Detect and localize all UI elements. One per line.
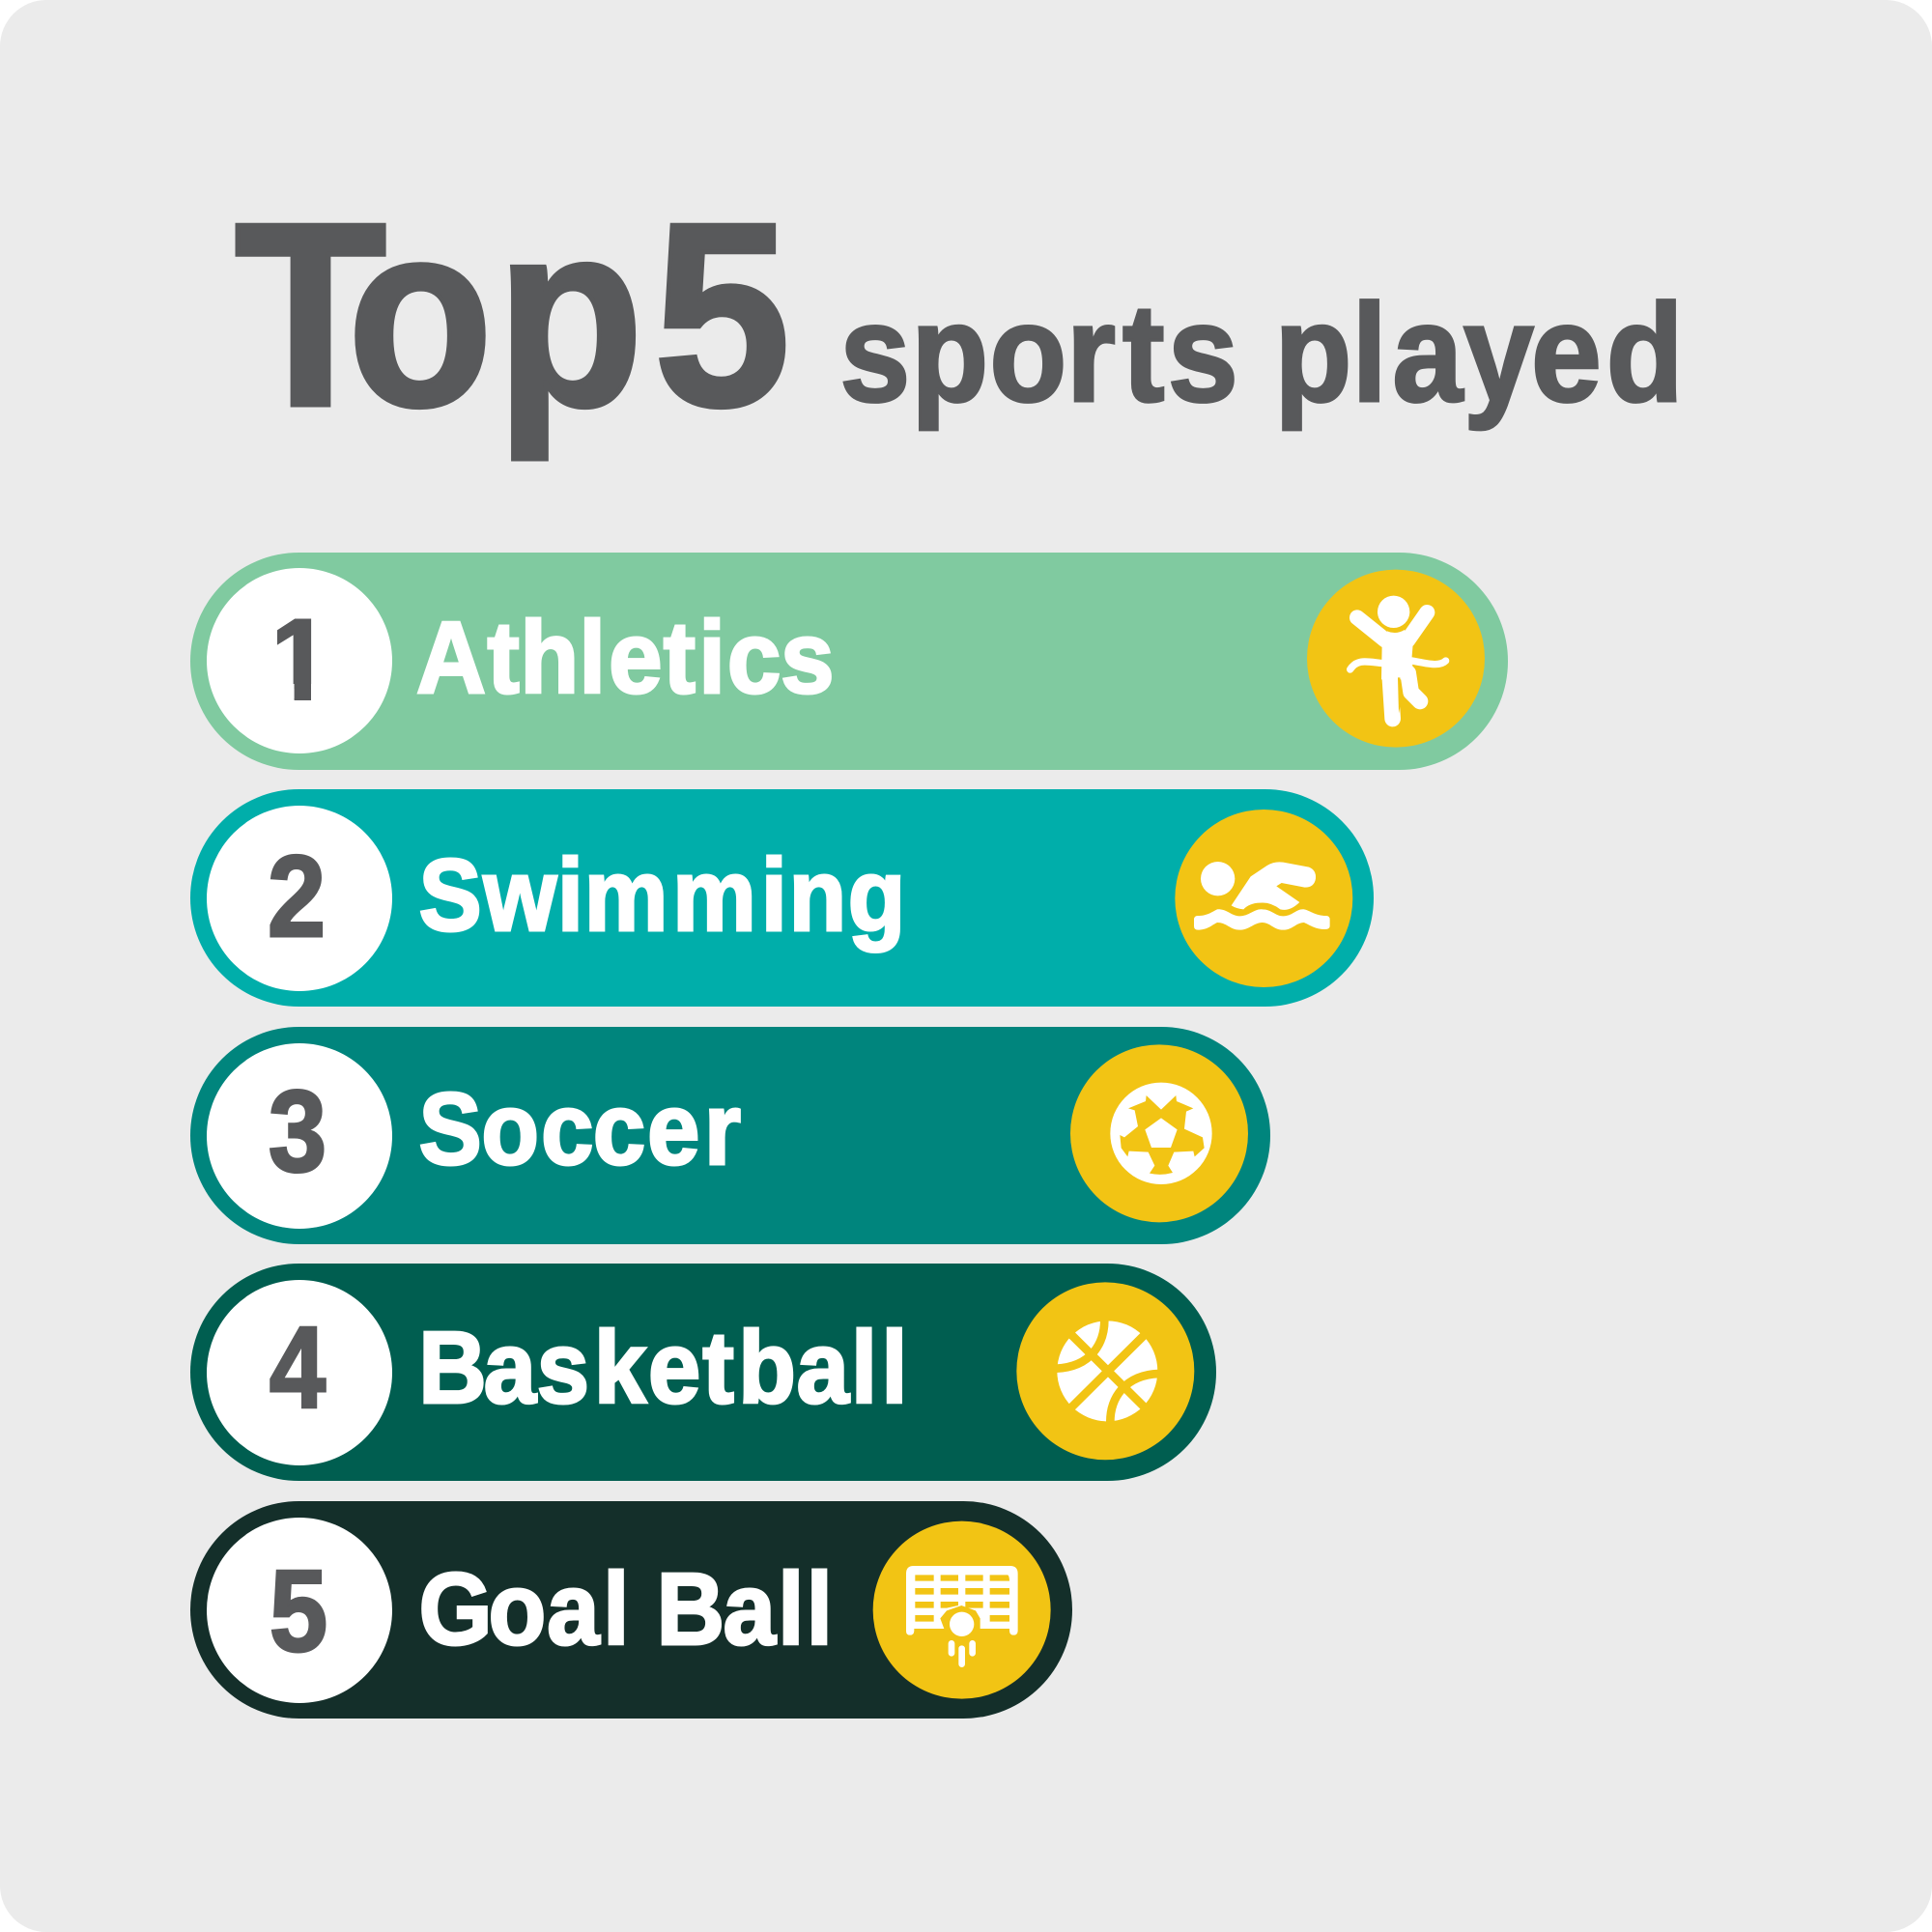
row 1: Athletics	[190, 553, 1508, 770]
bar: Soccer	[190, 1027, 1270, 1244]
bar: Athletics	[190, 553, 1508, 770]
bar: Goal Ball	[190, 1501, 1072, 1719]
rank circle 5	[207, 1518, 392, 1703]
rank number 4: 4	[270, 1302, 326, 1433]
icon: runner at finish line	[1307, 570, 1485, 748]
label: Basketball: Basketball	[418, 1310, 907, 1425]
rank number 1: 1	[268, 595, 331, 724]
title: p	[497, 170, 643, 462]
rank number 2: 2	[268, 833, 326, 961]
bar: Swimming	[190, 789, 1374, 1007]
title: 5	[654, 170, 790, 461]
row 3: Soccer	[190, 1027, 1270, 1244]
rank number 3: 3	[269, 1067, 327, 1196]
icon: swimmer	[1175, 810, 1352, 987]
row 2: Swimming	[190, 789, 1374, 1007]
rank number 5: 5	[270, 1548, 327, 1676]
icon: goal net and ball	[873, 1521, 1051, 1699]
label: Goal Ball: Goal Ball	[419, 1551, 833, 1666]
rank circle 2	[207, 806, 392, 991]
icon: basketball	[1016, 1282, 1194, 1460]
row 4: Basketball	[190, 1264, 1216, 1481]
icon: soccer ball	[1070, 1044, 1248, 1222]
title: sports played	[839, 275, 1684, 431]
rank circle 1	[207, 568, 392, 753]
label: Swimming: Swimming	[419, 838, 905, 952]
title: o	[348, 170, 493, 461]
label: Soccer: Soccer	[419, 1071, 741, 1186]
rank circle 3	[207, 1043, 392, 1229]
title: T	[235, 170, 386, 461]
bar: Basketball	[190, 1264, 1216, 1481]
label: Athletics: Athletics	[416, 600, 835, 715]
title	[235, 170, 1684, 462]
row 5: Goal Ball	[190, 1501, 1072, 1719]
rank circle 4	[207, 1280, 392, 1465]
